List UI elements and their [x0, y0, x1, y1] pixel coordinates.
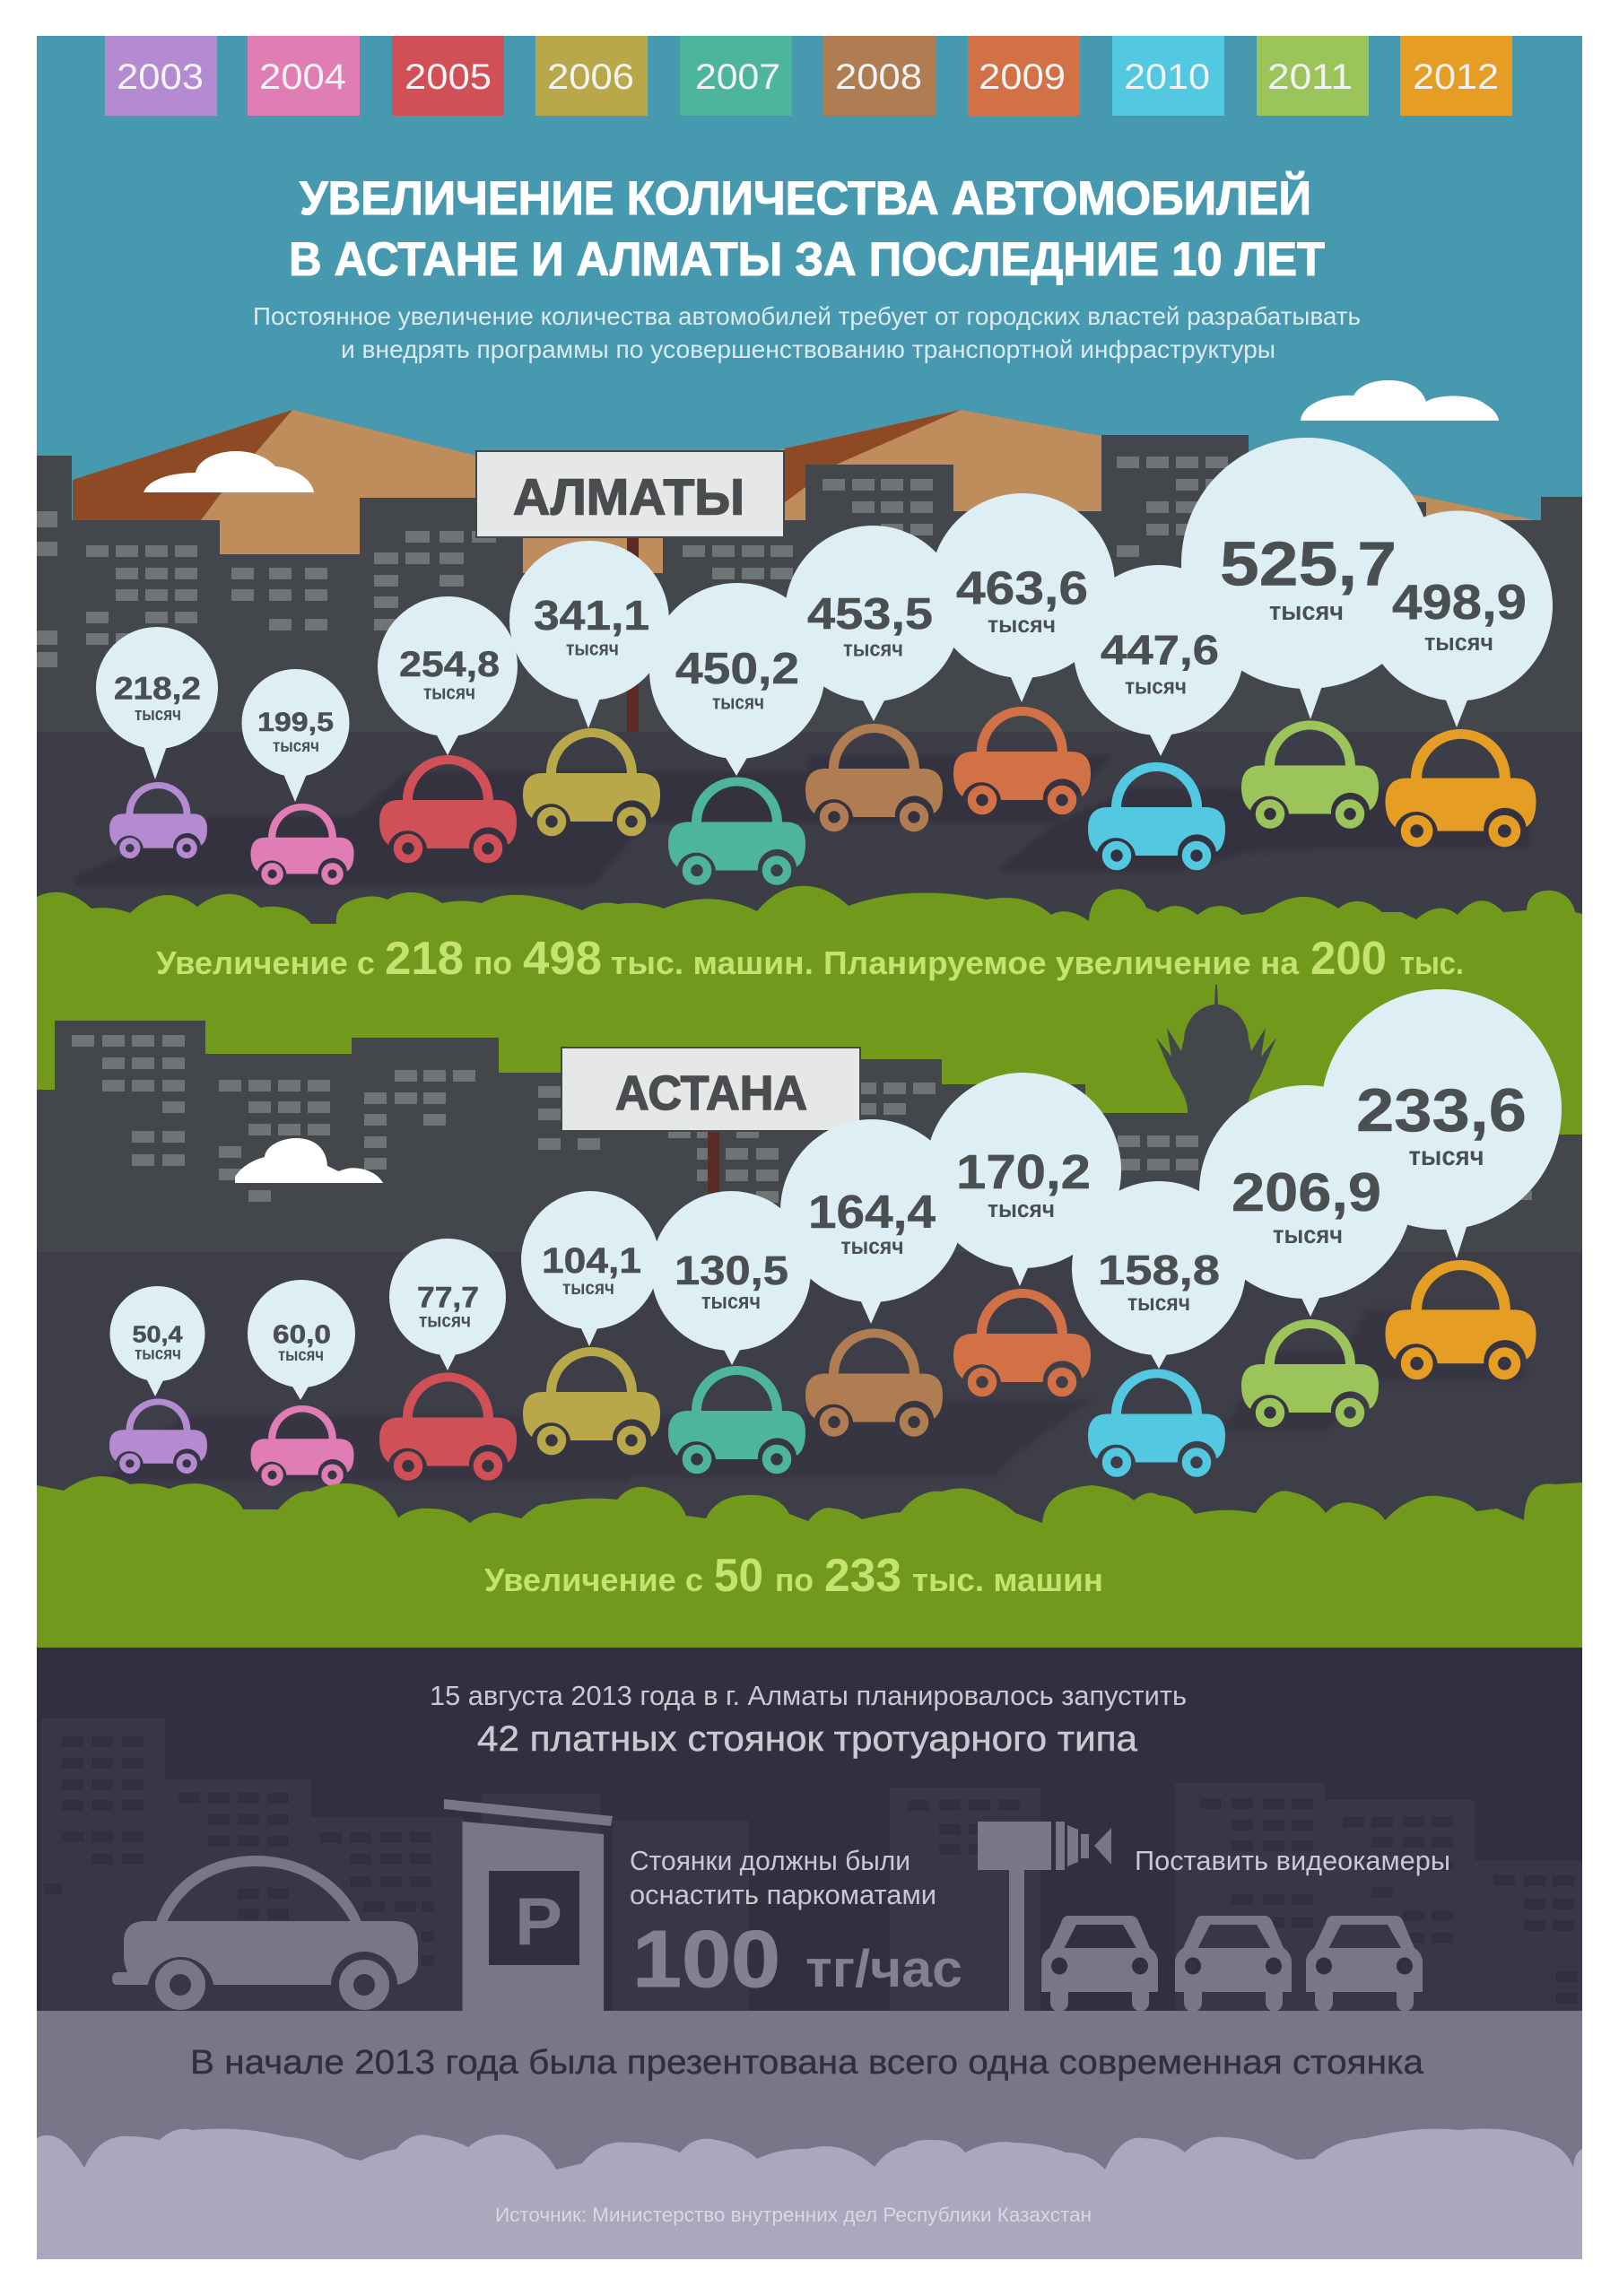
value 525,7 — [1220, 529, 1397, 626]
Astana summary text: по — [775, 1561, 814, 1598]
value 254,8: 254,8 — [399, 645, 500, 684]
value 77,7 — [417, 1282, 479, 1331]
car 2009 — [953, 707, 1091, 811]
Astana summary text: Увеличение с — [484, 1561, 703, 1598]
Astana green hedge — [37, 1476, 1582, 1650]
car 2009 — [953, 1289, 1091, 1392]
bubble 2008 — [780, 1119, 963, 1324]
bubble 2003 — [109, 1286, 205, 1396]
Almaty summary text: Планируемое увеличение на — [823, 944, 1300, 981]
tab 2003 — [105, 36, 217, 116]
value 60,0: тысяч — [278, 1346, 324, 1365]
value 453,5 — [807, 590, 933, 662]
car 2004 — [251, 1405, 354, 1483]
value 498,9: тысяч — [1424, 629, 1493, 656]
value 164,4: 164,4 — [808, 1187, 936, 1239]
value 104,1: тысяч — [562, 1278, 614, 1299]
tab 2006: 2006 — [547, 57, 634, 97]
value 218,2: тысяч — [135, 705, 181, 725]
video cameras text: Поставить видеокамеры — [1135, 1845, 1450, 1876]
parking meters text: оснастить паркоматами — [630, 1879, 936, 1910]
car 2012 — [1385, 729, 1536, 842]
car 2005 — [379, 1372, 517, 1476]
value 463,6: 463,6 — [956, 563, 1088, 615]
panel: parking — [37, 1648, 1582, 2011]
car 2011 — [1241, 1319, 1379, 1422]
Almaty speech bubbles — [96, 438, 1553, 802]
front car 1 — [1041, 1916, 1158, 2012]
cloud: right — [1301, 380, 1499, 421]
cloud: Astana — [235, 1138, 383, 1183]
Astana road — [37, 1252, 1582, 1530]
billboard panel — [561, 1048, 860, 1131]
value 104,1: 104,1 — [542, 1241, 641, 1281]
value 50,4: 50,4 — [133, 1320, 183, 1347]
value 450,2: 450,2 — [675, 645, 799, 693]
parking meters text: Стоянки должны были — [630, 1845, 910, 1876]
ground text: В начале 2013 года была презентована всего одна современная стоянка — [190, 2044, 1424, 2082]
car 2011 — [1241, 721, 1379, 824]
value 130,5 — [675, 1248, 788, 1314]
value 206,9 — [1232, 1162, 1381, 1248]
Astana speech bubbles — [109, 989, 1562, 1400]
car 2010 — [1088, 1369, 1225, 1473]
Almaty summary text: Увеличение с — [156, 944, 375, 981]
value 453,5: тысяч — [843, 638, 903, 662]
value 104,1 — [542, 1241, 641, 1299]
value 233,6: тысяч — [1408, 1142, 1484, 1171]
Astana skyline buildings — [37, 1021, 1582, 1256]
car 2003 — [109, 782, 207, 856]
car 2003 — [109, 1399, 207, 1471]
Almaty summary text: 498 — [523, 933, 602, 985]
value 525,7: тысяч — [1269, 597, 1344, 626]
car 2007 — [668, 777, 805, 881]
car 2006 — [523, 728, 660, 832]
billboard pole — [627, 537, 639, 732]
icon: Baiterek tower silhouette — [1156, 985, 1276, 1117]
tab 2008: 2008 — [835, 57, 922, 97]
value 463,6 — [956, 563, 1088, 638]
bubble 2005 — [389, 1239, 506, 1370]
bubble 2012 — [1321, 989, 1562, 1258]
Astana billboard — [561, 1048, 860, 1194]
Almaty skyline buildings — [37, 435, 1582, 735]
city name: Almaty: АЛМАТЫ — [513, 468, 744, 526]
value 164,4 — [808, 1187, 936, 1259]
bubble 2008 — [785, 526, 961, 721]
value 130,5: 130,5 — [675, 1248, 788, 1293]
parking heading line 1: 15 августа 2013 года в г. Алматы планировалось запустить — [430, 1680, 1187, 1711]
car 2004 — [251, 804, 354, 882]
Astana summary text: 233 — [824, 1550, 901, 1602]
value 60,0: 60,0 — [273, 1320, 331, 1349]
value 254,8 — [399, 645, 500, 704]
bubble 2004 — [248, 1280, 355, 1400]
value 463,6: тысяч — [988, 611, 1056, 638]
bubble 2012 — [1362, 511, 1553, 727]
value 447,6: тысяч — [1125, 674, 1187, 700]
Astana summary text: 50 — [714, 1550, 763, 1602]
value 199,5: тысяч — [273, 737, 319, 756]
Almaty summary text: 218 — [385, 933, 464, 985]
tab 2003: 2003 — [117, 57, 204, 97]
car 2005 — [379, 755, 517, 859]
value 77,7: 77,7 — [417, 1282, 479, 1314]
Almaty summary text: тыс. — [1400, 944, 1464, 981]
value 341,1: 341,1 — [534, 592, 649, 639]
parking ground band — [37, 2011, 1582, 2190]
tab 2007: 2007 — [695, 57, 780, 97]
green hedge and Astana section background — [37, 886, 1582, 1650]
building windows — [72, 1035, 1532, 1203]
title: УВЕЛИЧЕНИЕ КОЛИЧЕСТВА АВТОМОБИЛЕЙ — [300, 170, 1311, 225]
value 450,2 — [675, 645, 799, 714]
tab 2006 — [535, 36, 648, 116]
Astana summary text — [484, 1550, 1103, 1602]
tab 2004: 2004 — [259, 57, 346, 97]
car 2008 — [805, 1329, 943, 1432]
icon: video camera on pole — [978, 1822, 1111, 2013]
bubble 2011 — [1181, 438, 1432, 719]
value 498,9: 498,9 — [1392, 574, 1527, 630]
value 130,5: тысяч — [701, 1290, 761, 1314]
value 453,5: 453,5 — [807, 590, 933, 639]
icon: parking booth: P — [515, 1883, 562, 1959]
tab 2005 — [392, 36, 504, 116]
Almaty summary text: 200 — [1310, 933, 1387, 985]
tab 2007 — [680, 36, 792, 116]
tab 2004 — [248, 36, 360, 116]
subtitle — [253, 302, 1361, 363]
Astana bubble values — [133, 1076, 1527, 1365]
bubble 2011 — [1199, 1085, 1413, 1317]
value 233,6 — [1356, 1076, 1527, 1171]
value 158,8 — [1098, 1247, 1220, 1316]
car 2010 — [1088, 762, 1225, 866]
value 199,5 — [257, 708, 334, 756]
front car 2 — [1175, 1916, 1292, 2012]
parking heading line 2: 42 платных стоянок тротуарного типа — [477, 1719, 1138, 1759]
tab 2011 — [1257, 36, 1369, 116]
tab 2011: 2011 — [1267, 57, 1353, 97]
source footnote: Источник: Министерство внутренних дел Республики Казахстан — [495, 2204, 1092, 2226]
front car 3 — [1306, 1916, 1423, 2012]
bubble 2009 — [926, 1073, 1121, 1286]
value 158,8: тысяч — [1127, 1291, 1190, 1316]
building windows — [37, 457, 1228, 667]
value 60,0 — [273, 1320, 331, 1365]
price: 100 tenge per hour: 100 — [632, 1915, 780, 2005]
Almaty bubble values — [114, 529, 1527, 756]
icon: parking booth — [444, 1799, 613, 2013]
value 525,7: 525,7 — [1220, 529, 1397, 599]
icons: three cars front view — [1041, 1916, 1423, 2012]
value 450,2: тысяч — [712, 691, 764, 714]
Almaty road — [37, 732, 1582, 938]
value 170,2: тысяч — [988, 1196, 1055, 1222]
tab 2005: 2005 — [405, 57, 492, 97]
value 341,1: тысяч — [566, 638, 619, 660]
value 447,6: 447,6 — [1101, 626, 1219, 673]
value 254,8: тысяч — [423, 682, 475, 704]
bubble 2009 — [930, 493, 1115, 702]
subtitle: Постоянное увеличение количества автомобилей требует от городских властей разрабатывать — [253, 302, 1361, 330]
price: 100 tenge per hour — [632, 1915, 962, 2005]
car 2007 — [668, 1366, 805, 1469]
title: В АСТАНЕ И АЛМАТЫ ЗА ПОСЛЕДНИЕ 10 ЛЕТ — [289, 233, 1325, 286]
tab 2010: 2010 — [1124, 57, 1210, 97]
Astana cars — [109, 1260, 1536, 1483]
bubble 2006 — [521, 1191, 659, 1346]
tab 2009 — [968, 36, 1080, 116]
value 164,4: тысяч — [841, 1234, 904, 1259]
value 447,6 — [1101, 626, 1219, 700]
Almaty billboard — [476, 451, 784, 732]
value 50,4: тысяч — [135, 1344, 181, 1363]
bubble 2006 — [509, 541, 669, 728]
Almaty summary text — [156, 933, 1464, 985]
value 77,7: тысяч — [419, 1311, 471, 1331]
price: 100 tenge per hour: тг/час — [805, 1940, 962, 1998]
value 50,4 — [133, 1320, 183, 1363]
faint city silhouette — [41, 1718, 1582, 2011]
billboard pole — [708, 1131, 719, 1194]
value 218,2: 218,2 — [114, 672, 201, 707]
bubble 2010 — [1072, 1181, 1246, 1369]
bubble 2010 — [1074, 565, 1244, 756]
Almaty cars — [109, 707, 1536, 882]
value 206,9: 206,9 — [1232, 1162, 1381, 1222]
parking meters text — [630, 1845, 936, 1910]
tab 2010 — [1112, 36, 1224, 116]
car 2008 — [805, 724, 943, 827]
subtitle: и внедрять программы по усовершенствованию транспортной инфраструктуры — [341, 335, 1275, 363]
Almaty summary text: по — [474, 944, 512, 981]
value 206,9: тысяч — [1273, 1221, 1343, 1248]
bubble 2004 — [242, 669, 350, 802]
bubble 2007 — [651, 1191, 811, 1365]
value 158,8: 158,8 — [1098, 1247, 1220, 1293]
year legend tabs — [105, 36, 1512, 116]
tab 2012 — [1400, 36, 1512, 116]
value 498,9 — [1392, 574, 1527, 656]
Almaty summary text: тыс. машин. — [611, 944, 814, 981]
billboard panel — [476, 451, 784, 537]
tab 2008 — [823, 36, 936, 116]
value 170,2: 170,2 — [956, 1145, 1091, 1199]
Astana summary text: тыс. машин — [912, 1561, 1103, 1598]
title — [289, 170, 1325, 286]
value 218,2 — [114, 672, 201, 725]
tab 2009: 2009 — [979, 57, 1066, 97]
mountains — [73, 410, 1539, 646]
bubble 2003 — [96, 627, 218, 779]
value 341,1 — [534, 592, 649, 660]
city name: Astana: АСТАНА — [615, 1066, 807, 1120]
value 170,2 — [956, 1145, 1091, 1222]
car 2006 — [523, 1347, 660, 1451]
bubble 2005 — [378, 596, 518, 755]
value 199,5: 199,5 — [257, 708, 334, 737]
cloud: left — [144, 451, 314, 492]
section: sky background — [37, 36, 1582, 753]
icon: parked car side view — [112, 1856, 418, 2003]
footer cloud band — [37, 2129, 1582, 2259]
bubble 2007 — [649, 583, 825, 776]
tab 2012: 2012 — [1413, 57, 1499, 97]
car 2012 — [1385, 1260, 1536, 1375]
value 233,6: 233,6 — [1356, 1076, 1527, 1144]
